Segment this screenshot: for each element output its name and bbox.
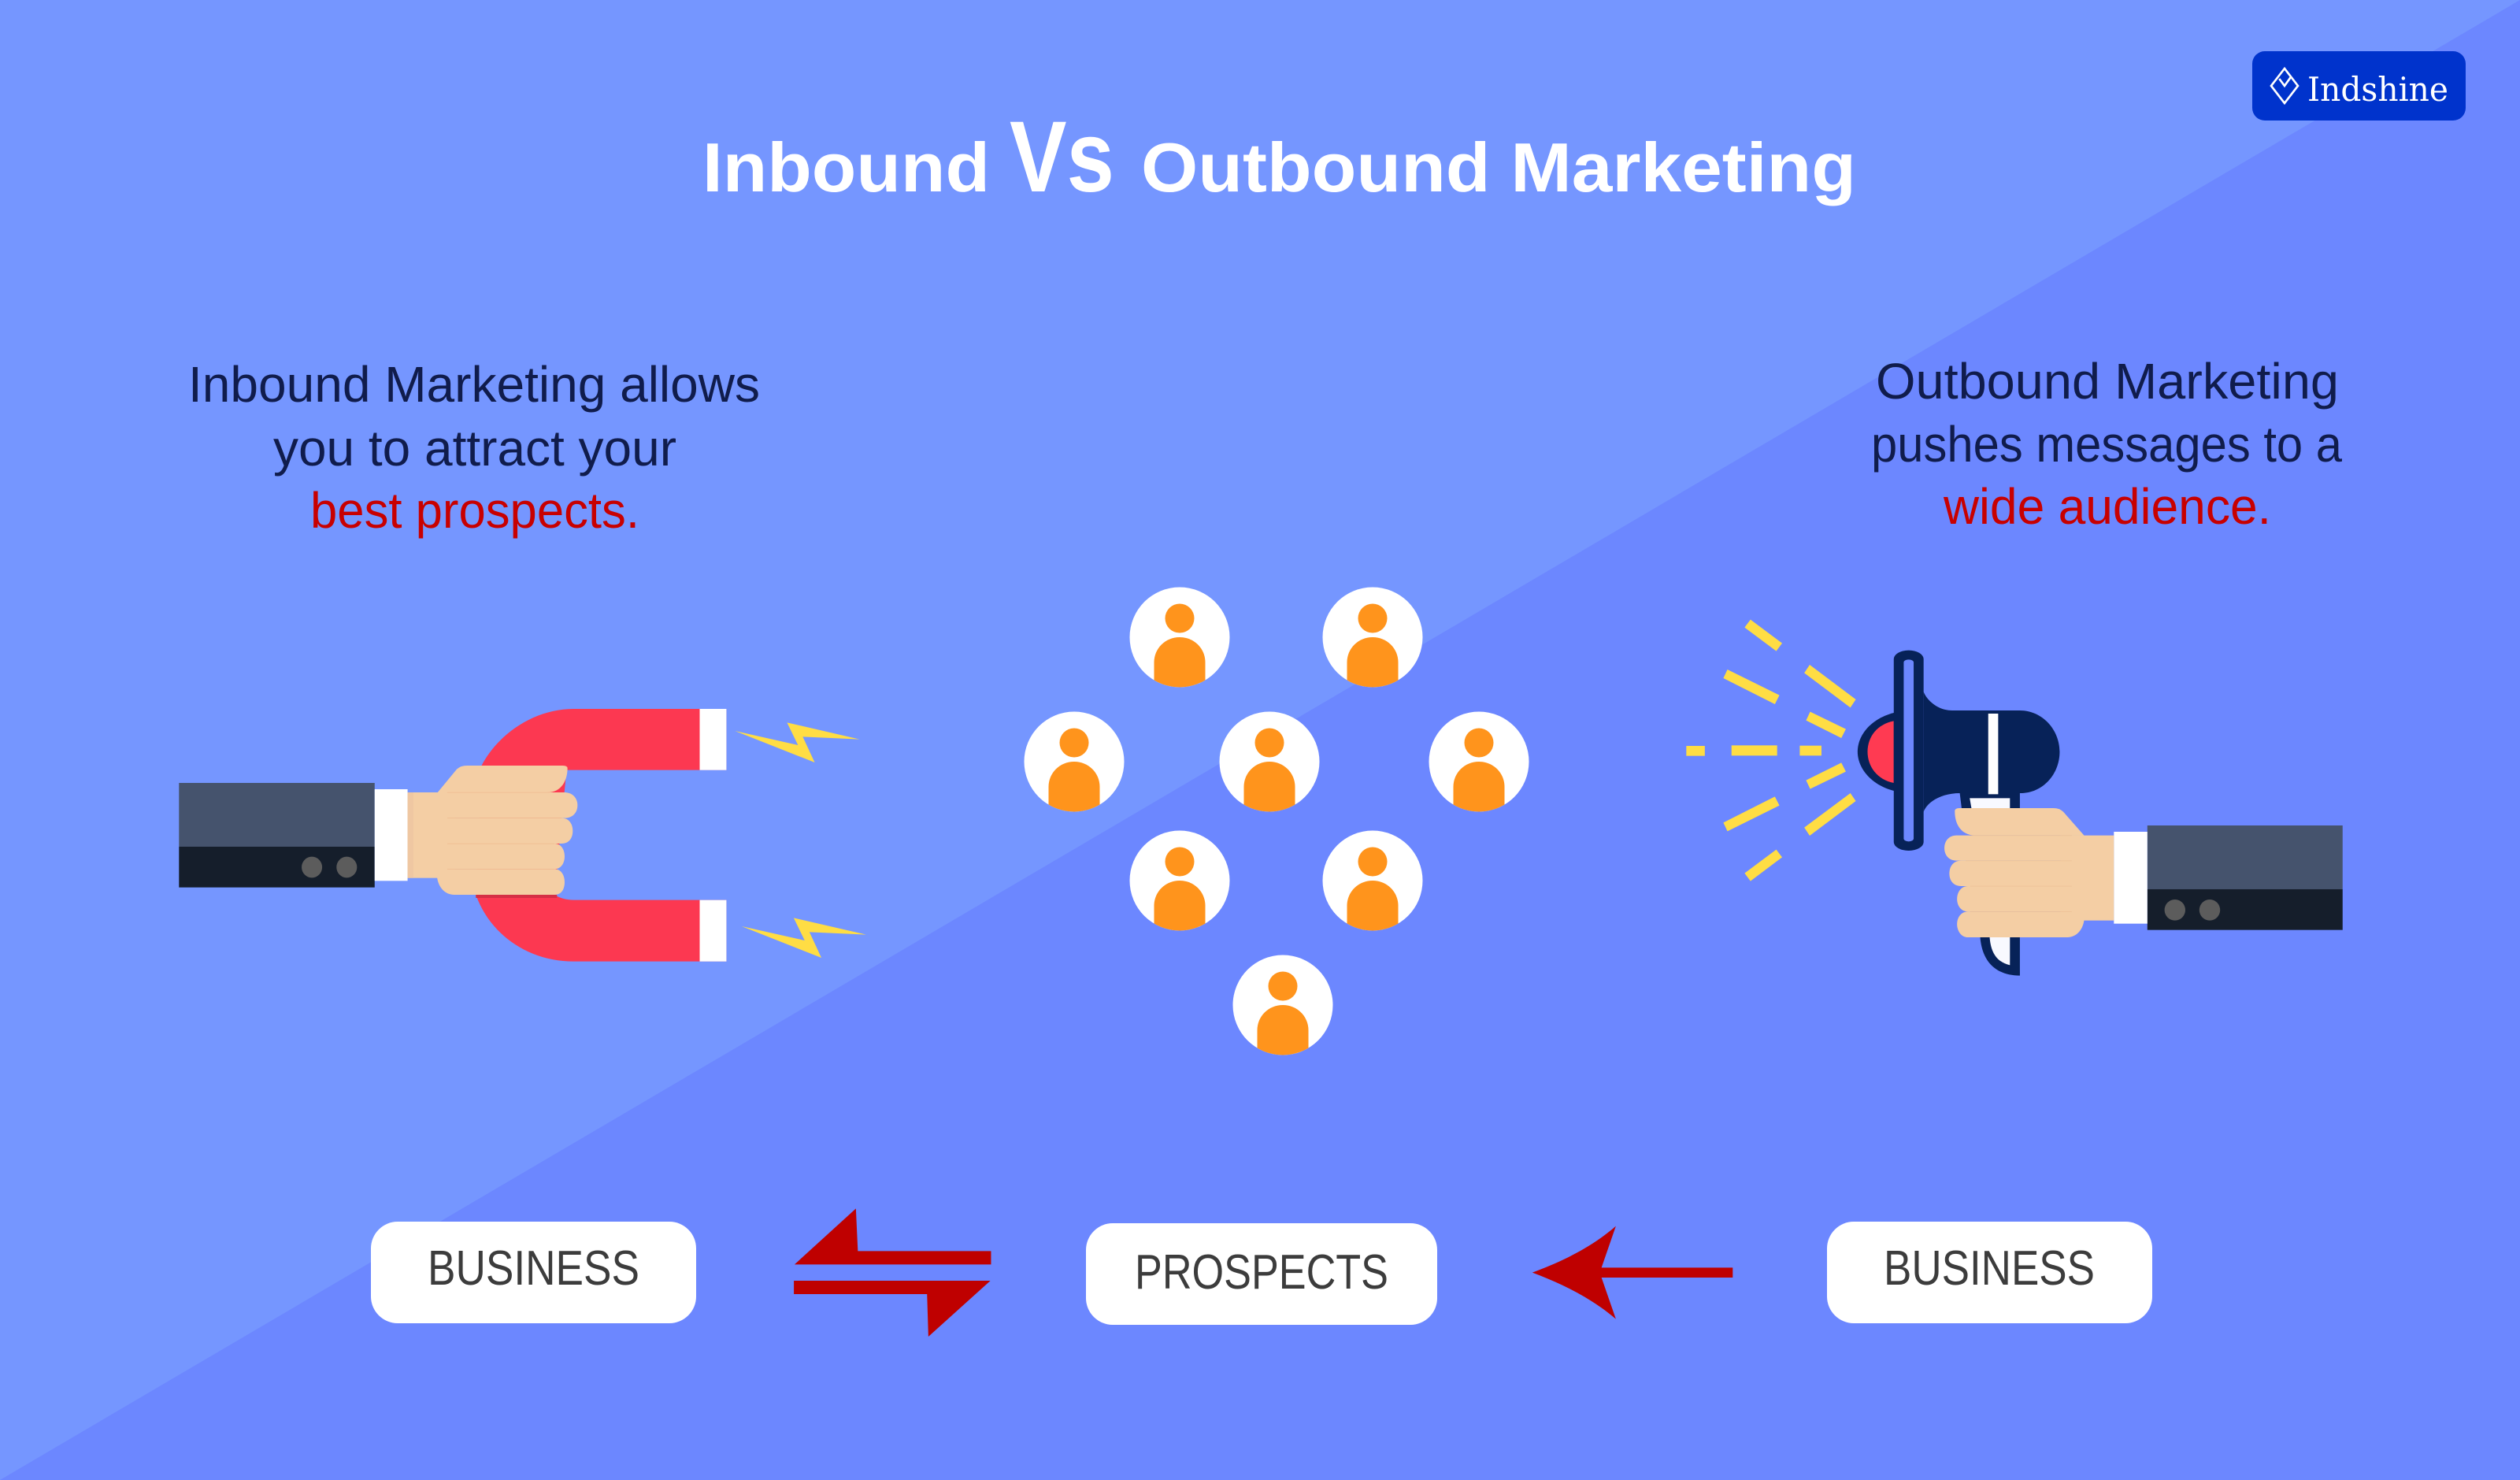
title: Vs (1010, 101, 1114, 213)
logo: Indshine badge: Indshine (2307, 70, 2448, 109)
person (1233, 955, 1332, 1055)
sleeve and cuff (2114, 825, 2343, 930)
box: prospects (1086, 1223, 1437, 1325)
text block: outbound description: Outbound Marketing (1876, 353, 2339, 410)
text block: inbound description (188, 356, 760, 539)
text block: outbound description: pushes messages to a (1871, 416, 2342, 473)
person (1429, 712, 1529, 811)
person (1323, 830, 1422, 931)
hand (1944, 808, 2114, 937)
text block: outbound description: wide audience. (1943, 478, 2271, 535)
box: business right: BUSINESS (1884, 1241, 2095, 1296)
box: prospects: PROSPECTS (1135, 1245, 1388, 1300)
title: Outbound Marketing (1141, 128, 1856, 206)
hand (408, 766, 577, 895)
logo: Indshine badge (2252, 51, 2466, 121)
title (702, 101, 1856, 213)
lightning bolts (735, 722, 866, 958)
box: business right (1827, 1222, 2152, 1323)
arrow: two-way exchange (794, 1208, 991, 1337)
sleeve and cuff (179, 783, 408, 888)
person (1129, 830, 1230, 931)
icon: hand holding magnet (179, 709, 866, 962)
box: business left: BUSINESS (428, 1241, 639, 1296)
text block: outbound description (1871, 353, 2342, 535)
megaphone (1858, 651, 2059, 976)
magnet (476, 709, 726, 962)
text block: inbound description: best prospects. (310, 482, 639, 539)
icon: hand holding megaphone (1686, 620, 2343, 976)
sound rays (1686, 620, 1856, 881)
text block: inbound description: you to attract your (273, 420, 676, 477)
text block: inbound description: Inbound Marketing allows (188, 356, 760, 413)
arrow: business to prospects (1532, 1226, 1732, 1319)
person (1219, 712, 1320, 811)
person (1024, 712, 1125, 811)
box: business left (371, 1222, 696, 1323)
icon group: prospects people (1024, 588, 1529, 1055)
person (1129, 588, 1230, 687)
title: Inbound (702, 128, 990, 206)
person (1323, 588, 1422, 687)
